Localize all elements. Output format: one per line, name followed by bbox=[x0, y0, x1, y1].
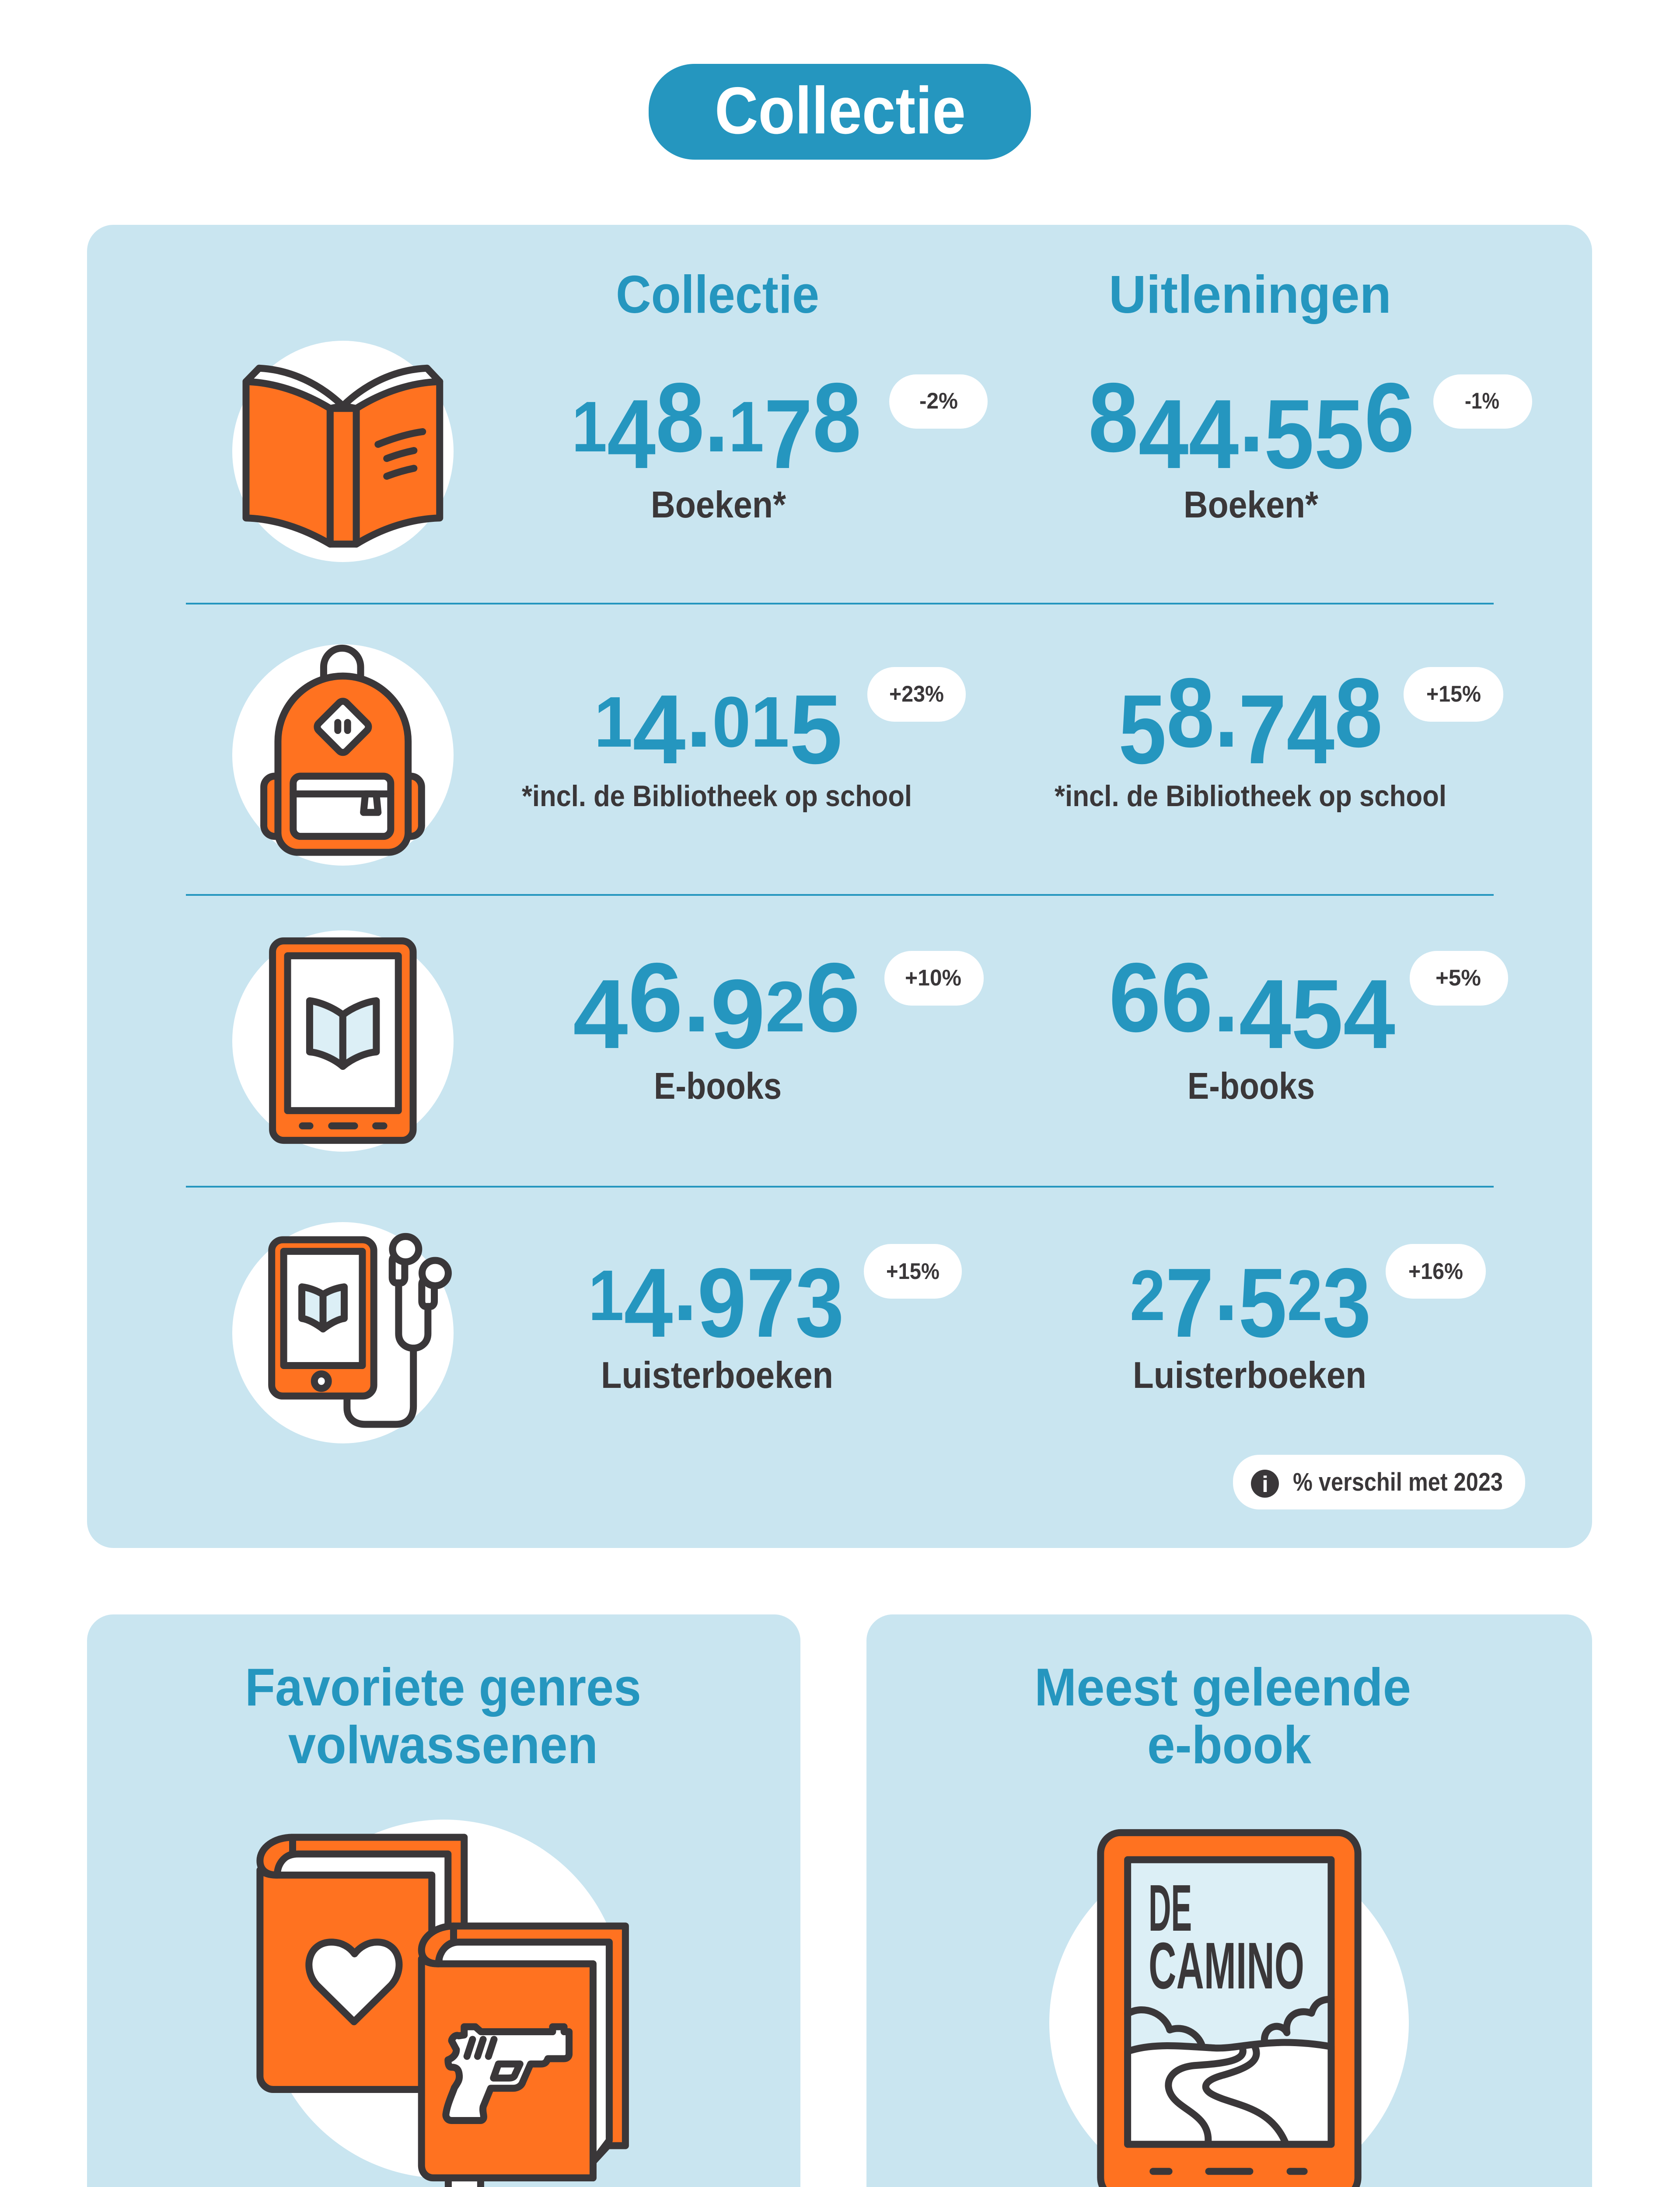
badge: +23% bbox=[867, 667, 966, 722]
badge: +5% bbox=[1410, 951, 1508, 1006]
row: e-books bbox=[232, 930, 1508, 1152]
badge: -1%: -1% bbox=[1465, 388, 1499, 414]
number: 46.926 collectie: 46.926 bbox=[573, 942, 860, 1069]
title pill bbox=[649, 64, 1031, 160]
badge: +10% bbox=[884, 951, 984, 1006]
row: luisterboeken bbox=[232, 1222, 1486, 1443]
heading: Collectie: Collectie bbox=[616, 265, 819, 324]
icon: e-reader with book cover De Camino: CAMINO bbox=[1149, 1928, 1304, 2002]
icon: e-reader bbox=[232, 930, 454, 1152]
title pill: Collectie bbox=[715, 73, 966, 148]
heading: Favoriete genres volwassenen bbox=[245, 1657, 641, 1775]
icon: e-reader with book cover De Camino: DE bbox=[1149, 1871, 1192, 1945]
label: Luisterboeken uitleningen: Luisterboeken bbox=[1133, 1355, 1366, 1396]
badge: +15% bbox=[1404, 667, 1503, 722]
label: E-books: E-books bbox=[654, 1066, 782, 1107]
badge: +16% bbox=[1386, 1244, 1486, 1299]
panel: collectie en uitleningen bbox=[87, 225, 1592, 1548]
label: Luisterboeken: Luisterboeken bbox=[601, 1355, 833, 1396]
number: 14.973 collectie: 14.973 bbox=[588, 1231, 844, 1358]
badge: -1% bbox=[1433, 374, 1532, 429]
badge: +16%: +16% bbox=[1408, 1259, 1463, 1284]
badge: +15%: +15% bbox=[1426, 681, 1481, 707]
number: 66.454 uitleningen: 66.454 bbox=[1109, 942, 1395, 1069]
note: incl. de Bibliotheek op school: *incl. de Bibliotheek op school bbox=[522, 779, 912, 813]
panel: favoriete genres volwassenen bbox=[87, 1614, 800, 2187]
label: Boeken: Boeken* bbox=[651, 484, 786, 526]
label: Boeken uitleningen: Boeken* bbox=[1184, 484, 1318, 526]
badge: -2% bbox=[889, 374, 988, 429]
row: bibliotheek op school bbox=[232, 644, 1503, 866]
icon: two books with heart and gun bbox=[260, 1820, 625, 2187]
heading: Meest geleende e-book: Meest geleende bbox=[1034, 1657, 1411, 1717]
heading: Favoriete genres volwassenen: volwassenen bbox=[288, 1715, 598, 1775]
note: incl. de Bibliotheek op school uitleningen: *incl. de Bibliotheek op school bbox=[1055, 779, 1446, 813]
legend: % verschil met 2023: i bbox=[1262, 1472, 1268, 1497]
icon: backpack bbox=[232, 644, 454, 866]
badge: +15% bbox=[864, 1244, 962, 1299]
label: E-books uitleningen: E-books bbox=[1188, 1066, 1315, 1107]
heading: Meest geleende e-book bbox=[1034, 1657, 1411, 1775]
panel: meest geleende e-book bbox=[866, 1614, 1592, 2187]
badge: +5%: +5% bbox=[1436, 965, 1481, 991]
legend: % verschil met 2023 bbox=[1233, 1455, 1525, 1509]
heading: Meest geleende e-book: e-book bbox=[1147, 1715, 1311, 1775]
badge: +15%: +15% bbox=[886, 1259, 940, 1284]
number: 148.178 boeken: 148.178 bbox=[572, 362, 861, 489]
icon: open book bbox=[232, 341, 454, 562]
number: 14.015 collectie: 14.015 bbox=[594, 657, 842, 784]
row: boeken bbox=[232, 341, 1532, 562]
icon: phone with earphones bbox=[232, 1222, 454, 1443]
icon: e-reader with book cover De Camino bbox=[1049, 1833, 1409, 2187]
heading: Uitleningen: Uitleningen bbox=[1109, 265, 1391, 324]
number: 844.556 uitleningen: 844.556 bbox=[1088, 362, 1415, 489]
heading: Favoriete genres volwassenen: Favoriete genres bbox=[245, 1657, 641, 1717]
badge: +10%: +10% bbox=[905, 965, 961, 991]
number: 58.748 uitleningen: 58.748 bbox=[1118, 657, 1383, 784]
badge: +23%: +23% bbox=[889, 681, 944, 707]
legend: % verschil met 2023: % verschil met 2023 bbox=[1293, 1468, 1503, 1496]
number: 27.523 uitleningen: 27.523 bbox=[1130, 1231, 1371, 1358]
badge: -2%: -2% bbox=[919, 388, 958, 414]
